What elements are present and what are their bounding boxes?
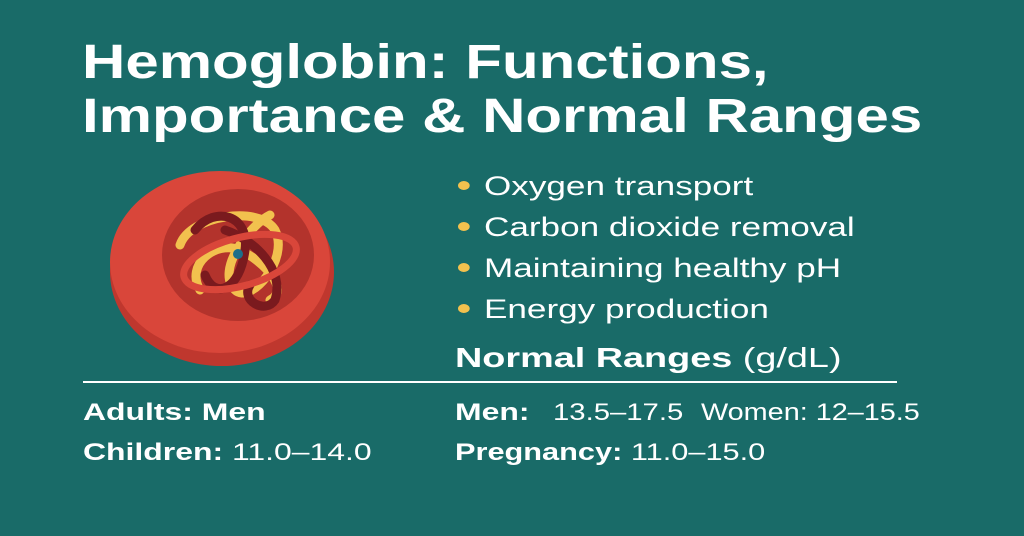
- functions list: [458, 171, 855, 324]
- ranges right: Women: 12–15.5: [701, 399, 920, 426]
- subheading: Normal Ranges (g/dL): [455, 342, 842, 373]
- ranges right: [455, 399, 920, 466]
- ranges right: 13.5–17.5: [553, 399, 683, 426]
- ranges right: Men:: [455, 399, 529, 426]
- ranges left: Children: 11.0–14.0: [83, 439, 372, 466]
- title: Hemoglobin: Functions,: [82, 36, 769, 89]
- functions list: Energy production: [484, 294, 769, 324]
- ranges left: Adults: Men: [83, 399, 266, 426]
- ranges left: [83, 399, 372, 466]
- title: [82, 36, 922, 143]
- title: Importance & Normal Ranges: [82, 90, 922, 143]
- illustration: red blood cell with hemoglobin: [110, 171, 334, 366]
- functions list: Oxygen transport: [484, 171, 753, 201]
- ranges right: Pregnancy: 11.0–15.0: [455, 439, 765, 466]
- functions list: Maintaining healthy pH: [484, 253, 841, 283]
- functions list: Carbon dioxide removal: [484, 212, 855, 242]
